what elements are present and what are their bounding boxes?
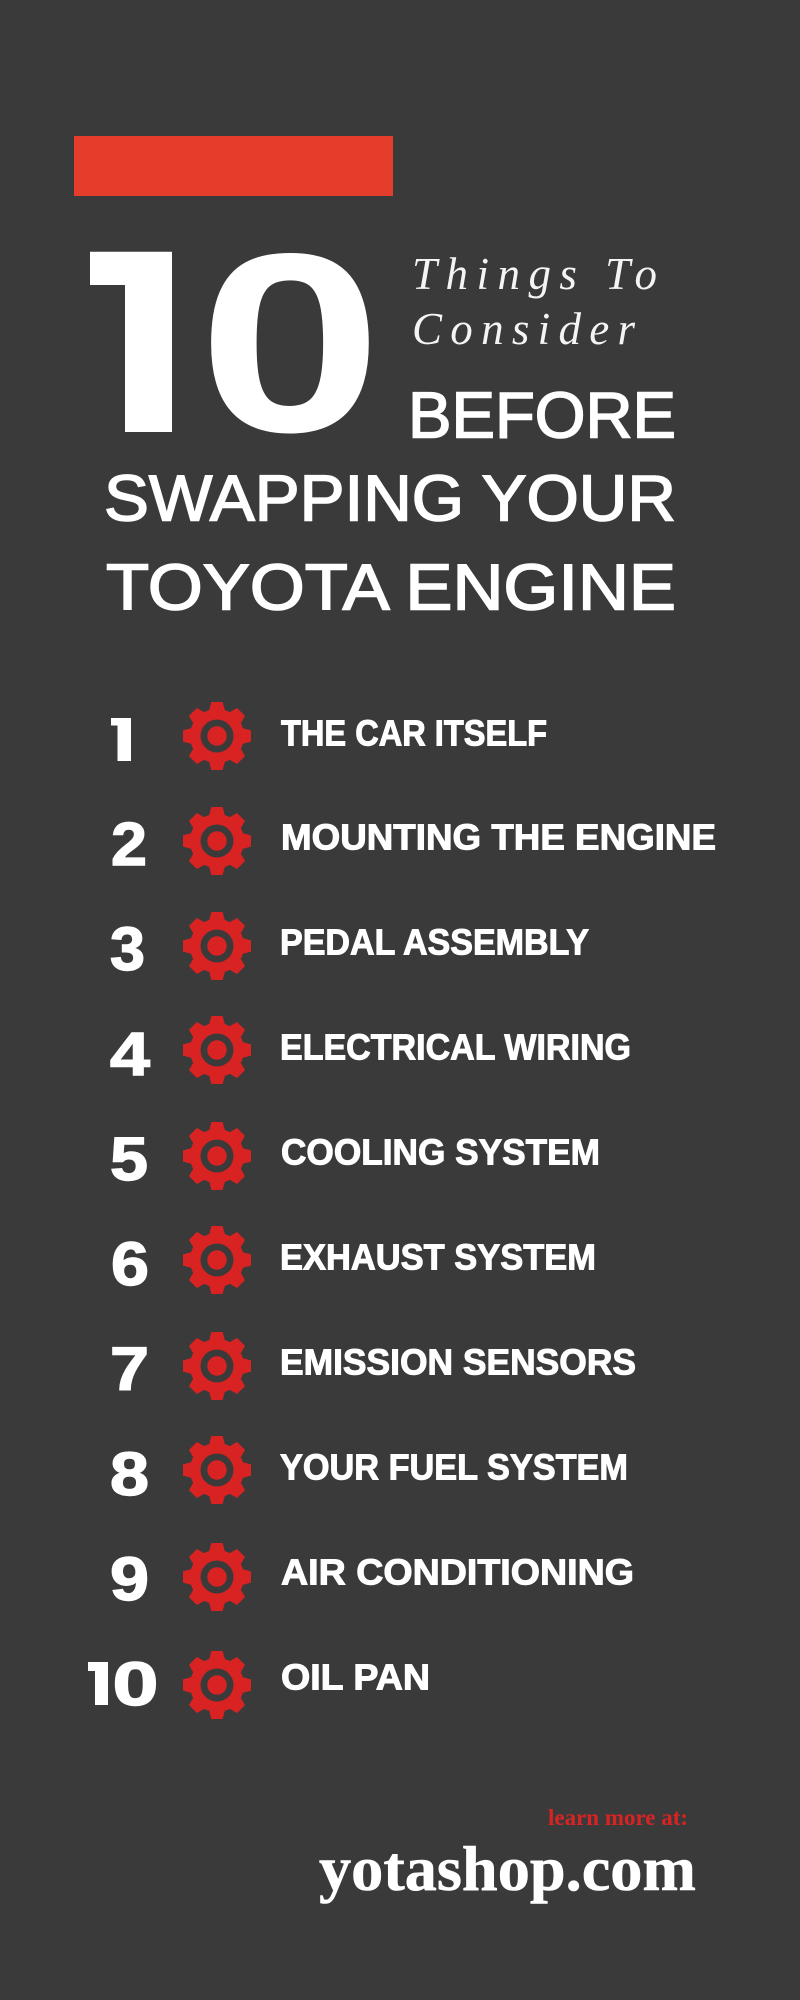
row 2: 2 [111, 810, 147, 878]
big number 10: 0 [198, 200, 382, 485]
row 4: 4 [110, 1020, 150, 1088]
row 2 [111, 807, 716, 878]
heading: swapping your: SWAPPING YOUR [104, 462, 676, 534]
red accent bar [74, 136, 393, 196]
row 5: COOLING SYSTEM [281, 1132, 600, 1172]
row 2: MOUNTING THE ENGINE [281, 816, 716, 858]
row 3 [110, 912, 589, 983]
subtitle: consider: Consider [412, 304, 635, 354]
row 7: EMISSION SENSORS [280, 1342, 636, 1382]
row 9 [110, 1543, 634, 1613]
row 5 [110, 1122, 600, 1193]
row 8: YOUR FUEL SYSTEM [280, 1446, 628, 1488]
row 8: 8 [110, 1440, 149, 1508]
row 7: 7 [110, 1335, 149, 1403]
row 9: 9 [110, 1545, 149, 1613]
footer call to action [319, 1805, 696, 1904]
row 4: ELECTRICAL WIRING [280, 1026, 631, 1068]
row 3: 3 [110, 915, 145, 983]
website address: yotashop.com [319, 1833, 696, 1904]
row 8 [110, 1436, 628, 1508]
list of ten considerations [88, 702, 716, 1719]
row 6 [111, 1226, 596, 1298]
row 9: AIR CONDITIONING [281, 1552, 634, 1592]
row 10 [88, 1651, 428, 1719]
row 1 [111, 702, 546, 770]
row 1: THE CAR ITSELF [281, 712, 547, 754]
row 10: OIL PAN [281, 1656, 430, 1698]
row 5: 5 [110, 1125, 148, 1193]
heading: before: BEFORE [408, 378, 676, 452]
subtitle: things to: Things To [412, 249, 657, 299]
heading: toyota engine: TOYOTA ENGINE [106, 550, 676, 624]
row 6: 6 [111, 1230, 149, 1298]
title block [90, 252, 674, 611]
row 7 [110, 1332, 636, 1403]
big number 10 [90, 252, 369, 434]
row 1: 1 [27, 705, 199, 774]
row 6: EXHAUST SYSTEM [280, 1236, 596, 1278]
row 10: 0 [112, 1650, 158, 1718]
row 10: 1 [4, 1649, 176, 1718]
row 4 [110, 1016, 631, 1088]
learn more label: learn more at: [548, 1805, 688, 1830]
row 3: PEDAL ASSEMBLY [280, 922, 589, 962]
